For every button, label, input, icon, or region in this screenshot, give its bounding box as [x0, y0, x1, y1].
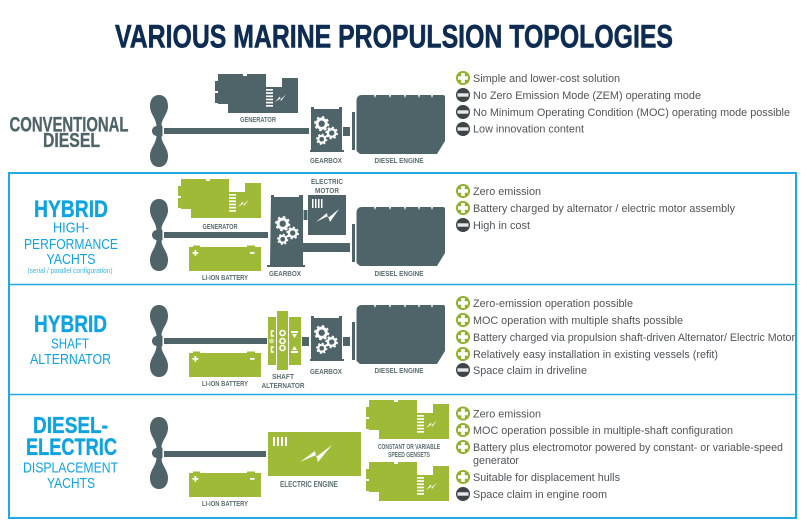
diagram: conventional driveline — [150, 74, 445, 167]
panel: hybrid shaft alternator — [30, 296, 795, 390]
icon: genset bottom — [366, 462, 449, 501]
icon: propeller — [150, 95, 168, 167]
panel: hybrid high-performance yachts — [24, 177, 735, 282]
heading: hybrid shaft alternator: SHAFT — [51, 336, 89, 352]
label: battery: LI-ION BATTERY — [202, 379, 248, 388]
shaft — [164, 451, 266, 457]
heading: hybrid high-performance: HYBRID — [34, 196, 108, 223]
icon: generator — [178, 179, 261, 218]
connector — [343, 337, 350, 346]
heading: conventional diesel: CONVENTIONAL — [10, 114, 129, 136]
icon: battery — [189, 352, 261, 377]
heading: hybrid high-performance: (serial / parallel configuration) — [28, 268, 112, 275]
label: gearbox: GEARBOX — [310, 156, 342, 165]
list: diesel-electric pros and cons — [456, 406, 783, 501]
heading: diesel-electric: YACHTS — [47, 475, 95, 492]
heading: diesel-electric: DIESEL- — [33, 412, 108, 438]
list: hybrid pros and cons: Battery charged by alternator / electric motor assembly — [473, 203, 735, 215]
icon: diesel engine — [352, 305, 445, 364]
label: diesel engine: DIESEL ENGINE — [374, 156, 424, 165]
icon: battery — [189, 246, 261, 271]
list: conventional pros and cons: No Zero Emission Mode (ZEM) operating mode — [473, 90, 701, 102]
heading: hybrid shaft alternator — [30, 311, 111, 368]
list: conventional pros and cons — [456, 71, 790, 136]
label: electric engine: ELECTRIC ENGINE — [280, 480, 339, 489]
label: battery: LI-ION BATTERY — [202, 499, 248, 508]
list: shaft alternator pros and cons: MOC operation with multiple shafts possible — [473, 315, 683, 327]
icon: tall gearbox — [267, 195, 305, 267]
heading: hybrid high-performance: PERFORMANCE — [24, 236, 118, 253]
diagram: shaft alternator driveline — [150, 305, 445, 390]
heading: hybrid shaft alternator: HYBRID — [34, 311, 107, 338]
connector small — [304, 210, 308, 220]
icon: electric motor — [308, 195, 346, 235]
icon: diesel engine — [352, 207, 445, 266]
icon: propeller — [150, 417, 168, 489]
label: gensets: SPEED GENSETS — [388, 452, 430, 459]
shaft — [164, 128, 309, 134]
panel: conventional diesel — [10, 71, 790, 167]
list: conventional pros and cons: Low innovation content — [473, 124, 584, 136]
connector — [303, 243, 350, 252]
list: diesel-electric pros and cons: Space claim in engine room — [473, 489, 607, 501]
label: electric motor: ELECTRIC — [311, 177, 343, 186]
list: shaft alternator pros and cons: Space claim in driveline — [473, 365, 587, 377]
list: diesel-electric pros and cons: MOC operation possible in multiple-shaft configuration — [473, 425, 733, 437]
label: gearbox: GEARBOX — [310, 367, 342, 376]
heading: diesel-electric: DISPLACEMENT — [23, 460, 118, 476]
label: generator: GENERATOR — [202, 222, 238, 231]
label: generator: GENERATOR — [240, 115, 276, 124]
panel: diesel-electric displacement yachts — [23, 400, 783, 508]
label: diesel engine: DIESEL ENGINE — [374, 269, 424, 278]
heading: diesel-electric — [23, 412, 118, 492]
list: diesel-electric pros and cons: Battery plus electromotor powered by constant- or variable-speed — [473, 442, 783, 454]
list: diesel-electric pros and cons: Suitable for displacement hulls — [473, 472, 620, 484]
list: shaft alternator pros and cons — [456, 296, 795, 377]
list: conventional pros and cons: No Minimum Operating Condition (MOC) operating mode possible — [473, 107, 790, 119]
label: electric motor — [311, 177, 343, 195]
connector — [302, 337, 309, 346]
label: shaft alternator: ALTERNATOR — [262, 381, 305, 390]
icon: propeller — [150, 199, 168, 271]
icon: gearbox — [310, 316, 344, 361]
icon: diesel engine — [352, 95, 445, 154]
list: diesel-electric pros and cons: generator — [473, 455, 519, 467]
label: electric motor: MOTOR — [315, 186, 340, 195]
heading: hybrid high-performance — [24, 196, 118, 275]
list: hybrid pros and cons: Zero emission — [473, 186, 541, 198]
heading: hybrid high-performance: YACHTS — [46, 251, 96, 268]
panel: topology frame — [9, 173, 796, 518]
icon: shaft alternator — [268, 311, 301, 370]
list: shaft alternator pros and cons: Relatively easy installation in existing vessels (refit) — [473, 349, 718, 361]
label: gensets: CONSTANT OR VARIABLE — [378, 444, 440, 451]
label: shaft alternator: SHAFT — [272, 372, 294, 381]
heading: hybrid high-performance: HIGH- — [53, 220, 89, 236]
list: diesel-electric pros and cons: Zero emission — [473, 408, 541, 420]
label: battery: LI-ION BATTERY — [202, 273, 248, 282]
diagram: diesel-electric driveline — [150, 400, 449, 508]
heading: hybrid shaft alternator: ALTERNATOR — [30, 351, 111, 368]
list: hybrid pros and cons: High in cost — [473, 220, 530, 232]
list: conventional pros and cons: Simple and lower-cost solution — [473, 73, 620, 85]
label: shaft alternator — [262, 372, 305, 390]
list: hybrid pros and cons — [456, 184, 735, 232]
icon: battery — [189, 472, 261, 497]
diagram: hybrid driveline — [150, 177, 445, 282]
label: gensets — [378, 444, 440, 459]
connector — [343, 127, 350, 136]
icon: propeller — [150, 305, 168, 377]
shaft — [164, 338, 267, 344]
label: diesel engine: DIESEL ENGINE — [374, 366, 424, 375]
list: shaft alternator pros and cons: Zero-emission operation possible — [473, 298, 633, 310]
heading: conventional diesel — [10, 114, 129, 152]
label: gearbox: GEARBOX — [269, 269, 301, 278]
heading: conventional diesel: DIESEL — [43, 130, 100, 152]
list: shaft alternator pros and cons: Battery charged via propulsion shaft-driven Alternator/ Electric Motor — [473, 332, 795, 344]
icon: genset top — [366, 400, 449, 439]
shaft — [164, 232, 268, 238]
icon: gearbox — [310, 107, 344, 152]
icon: electric engine — [268, 432, 361, 476]
heading: diesel-electric: ELECTRIC — [26, 434, 117, 461]
icon: generator — [215, 74, 298, 113]
